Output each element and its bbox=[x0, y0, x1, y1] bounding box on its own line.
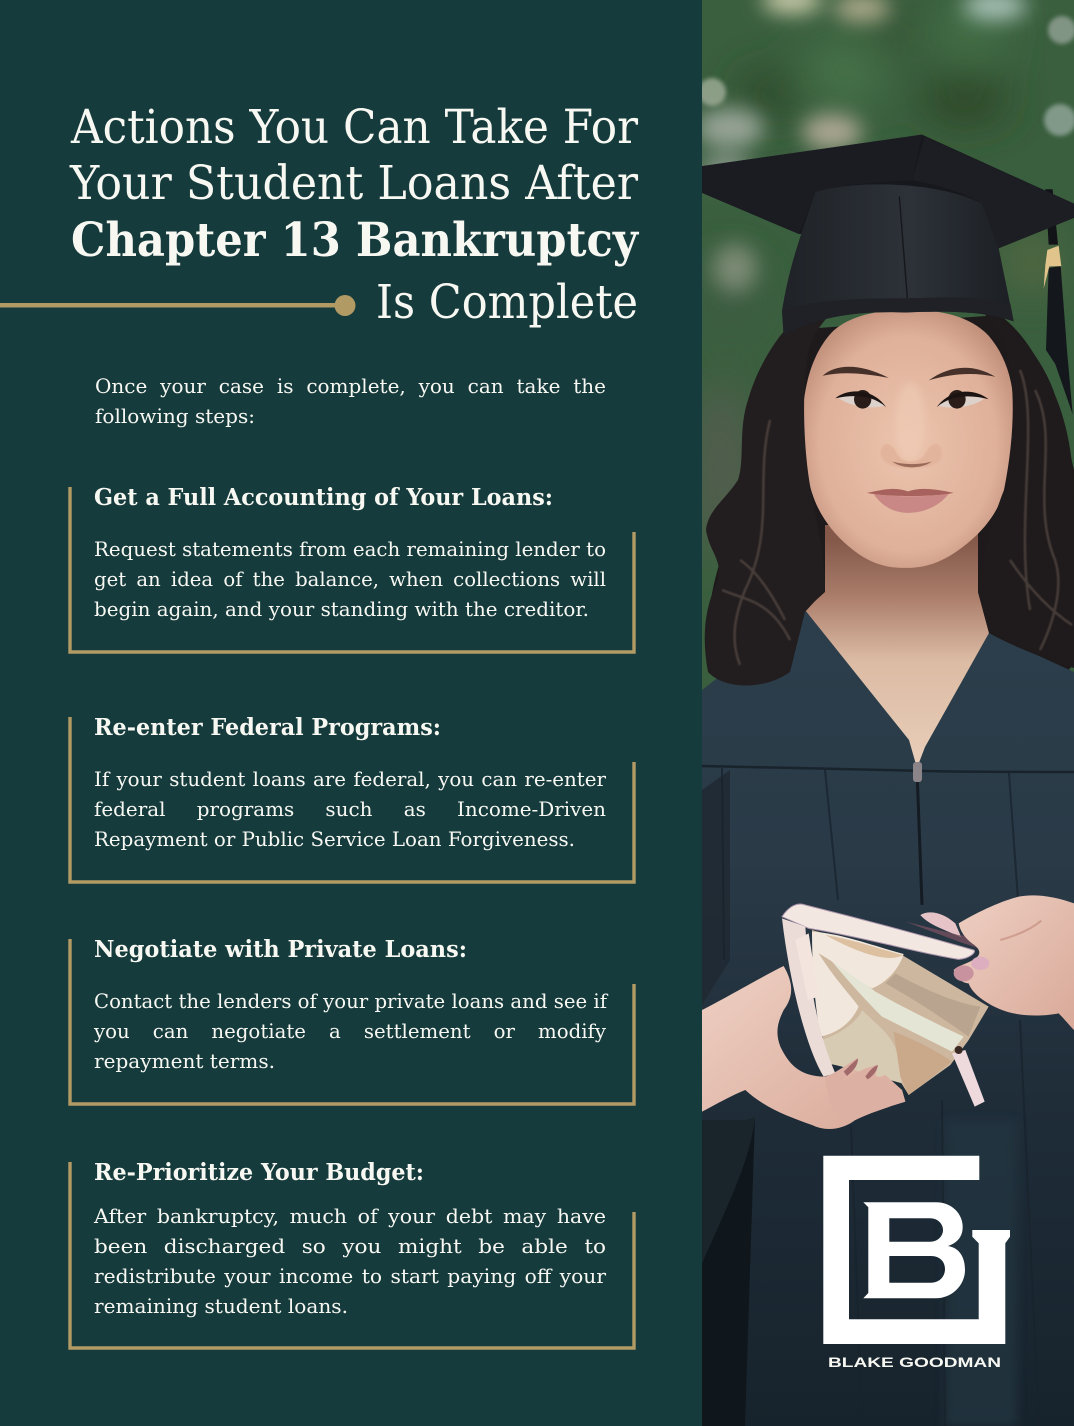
panel: step 1 bbox=[70, 483, 634, 652]
wallet interior bbox=[812, 930, 989, 1095]
gown yoke seam bbox=[702, 766, 1074, 772]
left hand fingers bbox=[825, 1058, 905, 1121]
hair back bbox=[709, 315, 1074, 683]
heading: step 2: Re-enter Federal Programs: bbox=[94, 713, 441, 741]
hair front bbox=[705, 305, 1074, 686]
gown lighter pleat bbox=[946, 1167, 1017, 1426]
panel: step 3 bbox=[70, 935, 634, 1104]
text: step 4: remaining student loans. bbox=[94, 1294, 348, 1318]
text: step 1: begin again, and your standing with the creditor. bbox=[94, 597, 589, 621]
right upper finger bbox=[920, 912, 961, 937]
wallet lower pocket bbox=[822, 1010, 902, 1083]
wallet zip strip bbox=[796, 933, 816, 1000]
wallet scalloped flap bbox=[812, 932, 904, 1037]
heading: step 3: Negotiate with Private Loans: bbox=[94, 935, 467, 963]
photo: graduate holding an empty wallet bbox=[694, 0, 1074, 1426]
text: step 4 bbox=[93, 1204, 606, 1318]
zip pull bbox=[952, 1050, 985, 1107]
face bbox=[802, 310, 1014, 568]
intro text bbox=[95, 374, 606, 428]
wallet bottom tan bbox=[894, 1032, 952, 1095]
eyebrows bbox=[823, 367, 995, 380]
text: step 4: redistribute your income to start paying off your bbox=[94, 1264, 606, 1288]
graduation cap and tassel bbox=[702, 135, 1074, 414]
logo wordmark: BLAKE GOODMAN bbox=[828, 1355, 1001, 1370]
title bbox=[69, 100, 640, 329]
right hand bbox=[954, 895, 1074, 1030]
title: Is Complete bbox=[376, 275, 638, 329]
panel: step 2 bbox=[70, 713, 634, 882]
text: step 1: get an idea of the balance, when collections will bbox=[94, 567, 606, 591]
gown bbox=[702, 610, 1074, 1426]
frame: step 3 bbox=[70, 939, 634, 1104]
wallet spine bbox=[782, 918, 835, 1077]
frame: step 2 bbox=[70, 717, 634, 882]
text: step 4: After bankruptcy, much of your debt may have bbox=[93, 1204, 606, 1228]
text: step 4: been discharged so you might be able to bbox=[94, 1234, 606, 1258]
panel: dark green background bbox=[0, 0, 702, 1426]
frame: step 4 bbox=[70, 1162, 634, 1348]
cap band bbox=[782, 298, 1014, 336]
intro text: following steps: bbox=[95, 404, 255, 428]
cap board bbox=[702, 135, 1074, 248]
hands and wallet bbox=[702, 895, 1074, 1129]
text: step 1 bbox=[94, 537, 606, 621]
gown shaded left sleeve bbox=[702, 1117, 755, 1426]
panel: step 4 bbox=[70, 1158, 634, 1348]
neck bbox=[805, 525, 989, 782]
cap seam bbox=[899, 196, 907, 298]
text: step 3: repayment terms. bbox=[94, 1049, 275, 1073]
text: step 3: you can negotiate a settlement or modify bbox=[93, 1019, 607, 1043]
left hand palm bbox=[702, 966, 905, 1129]
text: step 3: Contact the lenders of your private loans and see if bbox=[94, 989, 609, 1013]
wallet back pocket bbox=[885, 973, 980, 1037]
eyes bbox=[835, 390, 989, 409]
cap board right facet bbox=[998, 196, 1074, 248]
cap body bbox=[782, 184, 1014, 336]
nose bbox=[880, 444, 942, 469]
text: step 2: If your student loans are federal, you can re-enter bbox=[94, 767, 606, 791]
title: Chapter 13 Bankruptcy bbox=[71, 212, 640, 267]
intro text: Once your case is complete, you can take the bbox=[95, 374, 606, 398]
wallet top cover bbox=[782, 904, 975, 959]
lips bbox=[867, 489, 954, 513]
photo background: blurred greenery bbox=[694, 0, 1074, 720]
frame: step 1 bbox=[70, 487, 634, 652]
heading: step 4: Re-Prioritize Your Budget: bbox=[94, 1158, 424, 1186]
title: Your Student Loans After bbox=[69, 156, 639, 210]
text: step 3 bbox=[93, 989, 609, 1073]
title: Actions You Can Take For bbox=[70, 100, 639, 154]
gown clasp bbox=[913, 762, 922, 782]
logo: Blake Goodman bbox=[823, 1156, 1010, 1370]
cap board underside edge bbox=[702, 135, 922, 234]
logo mark bbox=[823, 1156, 1010, 1344]
text: step 2: Repayment or Public Service Loan Forgiveness. bbox=[94, 827, 575, 851]
text: step 2 bbox=[94, 767, 606, 851]
heading: step 1: Get a Full Accounting of Your Loans: bbox=[94, 483, 553, 511]
text: step 2: federal programs such as Income-Driven bbox=[94, 797, 606, 821]
title rule with dot bbox=[0, 295, 356, 316]
tassel bbox=[1044, 189, 1073, 414]
text: step 1: Request statements from each remaining lender to bbox=[94, 537, 606, 561]
wallet light strip bbox=[832, 962, 964, 1052]
